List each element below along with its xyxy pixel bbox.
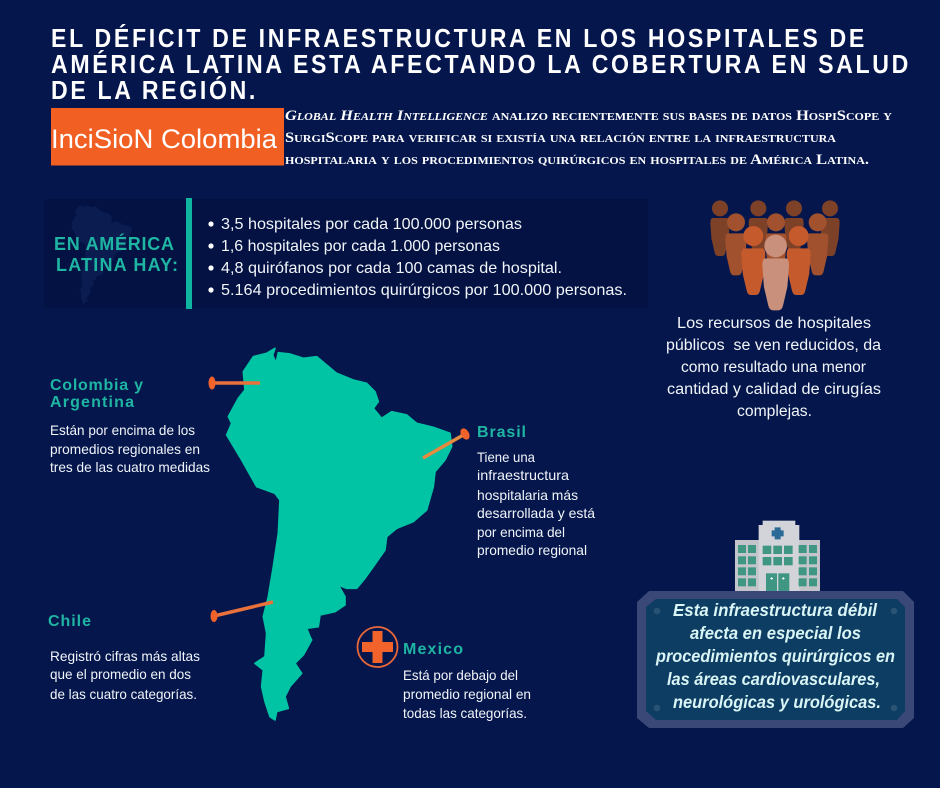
callout: Brasil: hospitalaria más xyxy=(477,487,578,503)
pin: Colombia and Argentina xyxy=(208,376,260,390)
callout: Brasil: promedio regional xyxy=(477,542,587,558)
text: public hospital resources: como resultado una menor xyxy=(681,359,866,376)
callout: Brasil: por encima del xyxy=(477,524,565,540)
callout plaque: weak infrastructure: Esta infraestructura débil xyxy=(673,600,878,620)
pin: Brasil xyxy=(423,427,471,458)
statistics list: 1,6 hospitales por cada 1.000 personas xyxy=(221,238,500,255)
text: public hospital resources: complejas. xyxy=(737,403,812,420)
callout: Mexico: promedio regional en xyxy=(403,686,531,702)
callout: Brasil: Tiene una xyxy=(477,449,535,465)
callout: Brasil: infraestructura xyxy=(477,467,569,483)
text: public hospital resources: públicos se ven reducidos, da xyxy=(666,337,881,354)
text: public hospital resources xyxy=(666,315,881,420)
teal divider bar xyxy=(186,198,192,309)
callout plaque: weak infrastructure xyxy=(637,591,914,728)
panel heading: EN AMÉRICA xyxy=(54,233,174,254)
callout: Colombia y Argentina: tres de las cuatro medidas xyxy=(50,459,210,475)
callout: Mexico: Mexico xyxy=(403,641,463,658)
callout: Brasil: desarrollada y está xyxy=(477,505,595,521)
callout plaque: weak infrastructure: afecta en especial los xyxy=(690,623,861,643)
intro paragraph: hospitalaria y los procedimientos quirúrgicos en hospitales de América Latina. xyxy=(285,152,869,168)
callout: Chile: que el promedio en dos xyxy=(50,666,191,682)
icon: medical cross xyxy=(358,627,398,667)
statistics list: 5.164 procedimientos quirúrgicos por 100.000 personas. xyxy=(221,282,627,299)
statistics list xyxy=(208,216,627,299)
map: South America xyxy=(227,348,452,720)
callout: Chile: de las cuatro categorías. xyxy=(50,686,197,702)
callout: Brasil xyxy=(477,424,595,558)
statistics list: 4,8 quirófanos por cada 100 camas de hospital. xyxy=(221,260,562,277)
brand box: IncisioN Colombia: InciSioN Colombia xyxy=(51,124,278,154)
callout: Mexico: Está por debajo del xyxy=(403,667,518,683)
title: DE LA REGIÓN. xyxy=(51,75,258,105)
icon: hospital building xyxy=(735,521,820,591)
callout: Colombia y Argentina: Argentina xyxy=(50,394,134,411)
callout: Colombia y Argentina: Colombia y xyxy=(50,377,143,394)
text: public hospital resources: Los recursos de hospitales xyxy=(677,315,871,332)
ghost map xyxy=(71,204,132,305)
callout plaque: weak infrastructure: neurológicas y urológicas. xyxy=(673,692,881,712)
callout: Colombia y Argentina: promedios regionales en xyxy=(50,441,200,457)
panel heading xyxy=(54,233,178,275)
intro paragraph: SurgiScope para verificar si existía una relación entre la infraestructura xyxy=(285,130,836,146)
callout: Brasil: Brasil xyxy=(477,424,526,441)
icon: group of people xyxy=(710,200,840,310)
panel: regional statistics xyxy=(44,198,648,309)
callout: Colombia y Argentina: Están por encima de los xyxy=(50,422,195,438)
callout: Chile: Registró cifras más altas xyxy=(50,648,200,664)
callout: Mexico: todas las categorías. xyxy=(403,705,527,721)
statistics list: 3,5 hospitales por cada 100.000 personas xyxy=(221,216,522,233)
callout: Mexico xyxy=(403,641,531,721)
pin: Chile xyxy=(210,602,273,622)
callout: Chile xyxy=(48,613,200,702)
intro paragraph xyxy=(285,108,892,168)
callout plaque: weak infrastructure: procedimientos quirúrgicos en xyxy=(655,646,895,666)
intro paragraph: Global Health Intelligence analizo recientemente sus bases de datos HospiScope y xyxy=(285,108,892,124)
title xyxy=(51,23,911,105)
callout plaque: weak infrastructure: las áreas cardiovasculares, xyxy=(667,669,880,689)
brand box: IncisioN Colombia xyxy=(51,108,284,166)
callout: Chile: Chile xyxy=(48,613,91,630)
callout: Colombia y Argentina xyxy=(50,377,210,475)
panel heading: LATINA HAY: xyxy=(56,255,178,275)
text: public hospital resources: cantidad y calidad de cirugías xyxy=(667,381,881,398)
